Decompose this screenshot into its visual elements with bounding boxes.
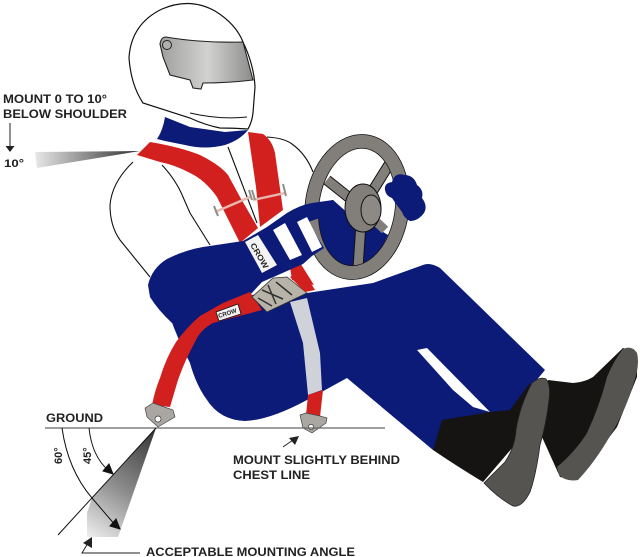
label: mount behind chest line (233, 453, 400, 482)
arrow: shoulder (6, 123, 14, 152)
floor mount: rear (300, 413, 327, 433)
glove hand (385, 174, 426, 221)
floor mount: front (145, 403, 175, 427)
label: mount below shoulder: BELOW SHOULDER (3, 107, 127, 121)
steering wheel (303, 135, 411, 279)
helmet (129, 3, 255, 129)
pants and lower body (150, 264, 545, 450)
anti-sub strap (290, 298, 322, 395)
lap belt (152, 292, 262, 407)
arc: 60 degrees (62, 428, 120, 529)
arrow: acceptable angle (82, 537, 140, 553)
shoulder strap: right (248, 132, 283, 227)
label: 45 degrees: 45° (82, 447, 94, 464)
acceptable angle wedge (87, 428, 156, 537)
wheel hub (345, 184, 381, 232)
near boot (433, 378, 550, 506)
far boot (542, 348, 638, 480)
label: mount behind chest line: MOUNT SLIGHTLY BEHIND (233, 453, 400, 467)
ground line (45, 427, 385, 429)
far boot sole (557, 348, 638, 480)
lower red strap (283, 220, 314, 285)
helmet visor (160, 37, 253, 89)
shoulder angle wedge (35, 151, 140, 168)
glove label: CROW (248, 242, 270, 271)
pants slit highlight (417, 348, 490, 412)
arrow: chest line mount (283, 436, 299, 447)
strap adjusters (214, 184, 286, 216)
label: mount behind chest line: CHEST LINE (233, 468, 310, 482)
60 degree reference line (58, 428, 156, 535)
arc: 45 degrees (89, 428, 113, 474)
lap belt: CROW (218, 308, 238, 320)
label: mount below shoulder: MOUNT 0 TO 10° (3, 92, 107, 106)
torso: white race suit (110, 136, 314, 277)
near boot sole (484, 378, 550, 506)
label: ground: GROUND (46, 411, 103, 425)
neck collar (157, 117, 248, 148)
belt label (216, 304, 241, 321)
shoulder strap: left (137, 142, 258, 243)
forearm behind wheel (315, 200, 388, 268)
harness buckle (252, 270, 315, 312)
red strap to floor mount (306, 390, 323, 417)
label: mount below shoulder (3, 92, 127, 121)
label: 10 degrees: 10° (4, 158, 24, 170)
label: 60 degrees: 60° (53, 447, 65, 464)
glove cuff stripes (273, 217, 322, 260)
glove label (245, 235, 277, 273)
upper arm sleeve (148, 200, 345, 328)
